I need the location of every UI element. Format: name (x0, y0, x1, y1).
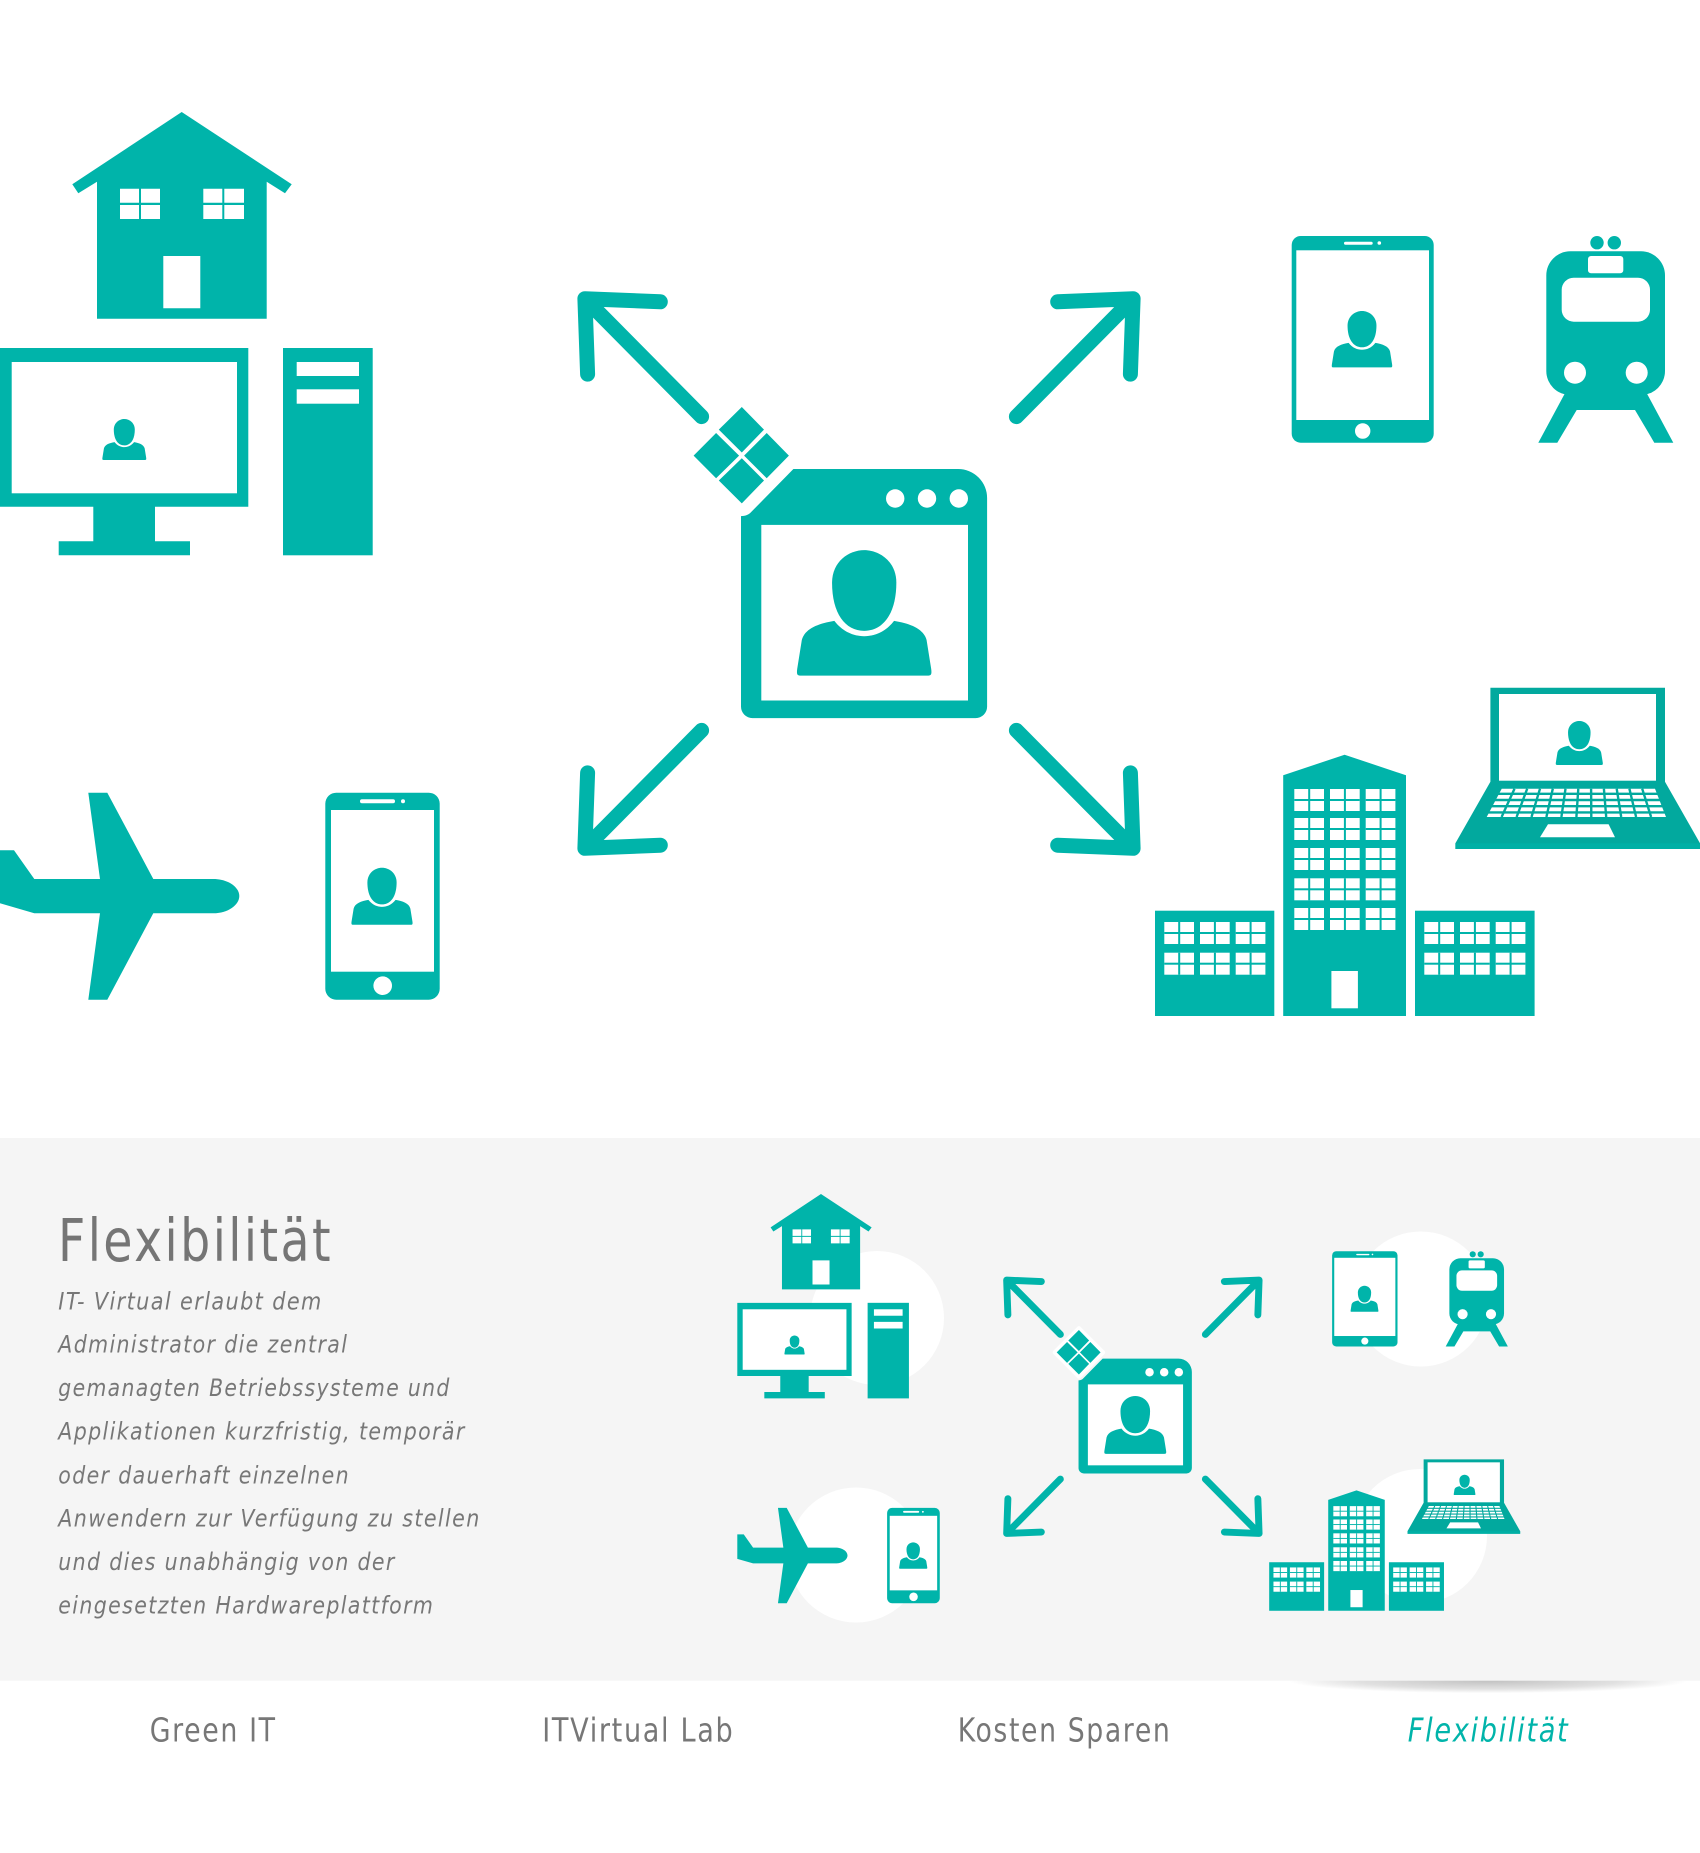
text block: description: Administrator die zentral (57, 1331, 348, 1359)
arrow: down left (585, 730, 702, 848)
icon: train (1538, 236, 1673, 443)
heading: Flexibilität: Flexibilität (58, 1206, 333, 1275)
text block: description: und dies unabhängig von der (58, 1548, 396, 1576)
navigation tabs: Green IT (150, 1711, 277, 1750)
icon: smartphone with user (325, 793, 440, 1000)
active tab shadow (1288, 1668, 1688, 1693)
navigation tabs (150, 1711, 1569, 1750)
text block: description: IT- Virtual erlaubt dem (58, 1287, 323, 1315)
text block: description: eingesetzten Hardwareplattform (58, 1591, 434, 1619)
navigation tabs: ITVirtual Lab (542, 1711, 734, 1750)
icon: computer tower (283, 348, 373, 555)
text block: description: oder dauerhaft einzelnen (58, 1461, 350, 1489)
main diagram: flexible access from any device (0, 112, 1700, 1016)
arrow: up left (585, 299, 702, 417)
icon: house (72, 112, 292, 319)
icon: laptop with user (1455, 688, 1700, 849)
icon: central application window with user (741, 469, 987, 718)
text block: description (57, 1287, 481, 1619)
text block: description: gemanagten Betriebssysteme und (58, 1374, 451, 1402)
navigation tabs: Kosten Sparen (958, 1711, 1171, 1750)
arrow: up right (1016, 299, 1133, 417)
icon: office buildings (1155, 755, 1535, 1016)
icon: tablet with user (1292, 236, 1434, 443)
text block: description: Anwendern zur Verfügung zu stellen (57, 1505, 481, 1533)
icon: desktop monitor with user (0, 348, 248, 555)
text block: description: Applikationen kurzfristig, temporär (57, 1418, 466, 1446)
panel: description background (0, 1138, 1700, 1681)
navigation tabs: Flexibilität (1408, 1711, 1569, 1750)
small diagram with white background blobs (737, 1194, 1520, 1622)
arrow: down right (1016, 730, 1133, 848)
icon: airplane (0, 793, 239, 1000)
icon: operating system diamond logo (690, 404, 794, 508)
